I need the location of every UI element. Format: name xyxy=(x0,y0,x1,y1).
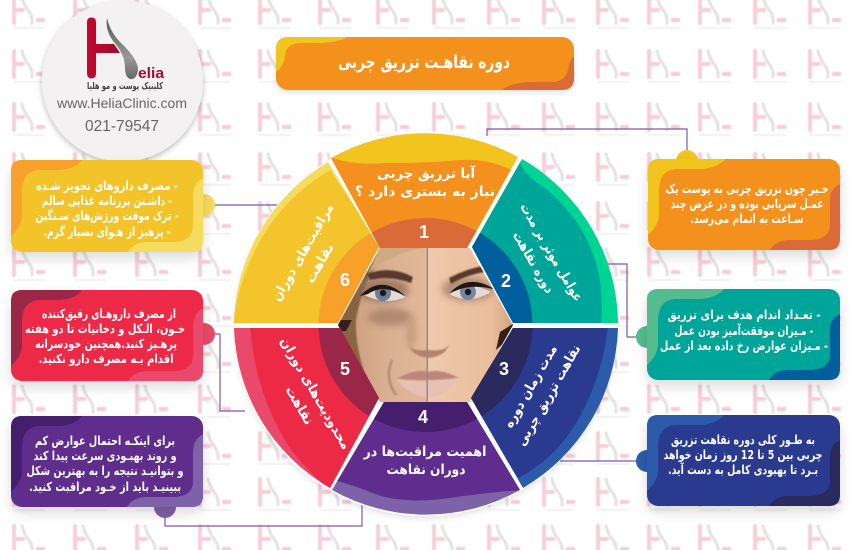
label 2: دوره نقاهت xyxy=(509,229,557,296)
panel: left importance of care: برای اینکـه احتمال عوارض کم xyxy=(35,433,175,448)
panel: right recovery time: چربی بین 5 تا 12 روز زمان خواهد xyxy=(663,447,822,462)
wheel backing xyxy=(234,134,616,516)
number 5: 5 xyxy=(340,359,350,379)
panel: left care tips: - داشـتن بررنامه غذایی سالم xyxy=(42,193,172,208)
wrinkles xyxy=(389,360,396,395)
label 1 xyxy=(355,165,495,200)
segment 6 xyxy=(234,162,379,323)
segment 5 xyxy=(234,328,379,488)
centre divider xyxy=(426,248,428,402)
number 4: 4 xyxy=(418,407,428,427)
phone: 021-79547 xyxy=(85,118,159,135)
connector lines xyxy=(165,129,687,526)
hair xyxy=(338,248,380,373)
lips xyxy=(396,371,459,380)
panel: left importance of care: و بتوانیـد نتیجه را به بهترین شکل xyxy=(26,463,184,478)
eye left xyxy=(360,285,406,301)
panel: right influencing factors xyxy=(636,289,840,380)
panel: left importance of care: ببینیـد باید از خـود مراقبت کنید. xyxy=(29,479,181,494)
panel: left importance of care: و روند بهبـودی سرعت پیدا کند xyxy=(34,448,176,463)
website: www.HeliaClinic.com xyxy=(56,96,187,111)
label 4 xyxy=(363,444,486,478)
eye right xyxy=(449,282,496,300)
panel: right hospitalization answer: سـاعت به اتمام می‌رسد. xyxy=(690,211,804,227)
number 1: 1 xyxy=(419,222,429,242)
face photo xyxy=(338,248,513,402)
label 4: دوران نقاهت xyxy=(386,462,466,478)
label 5: محدودیت‌های دوران xyxy=(276,335,354,452)
label 1: آیا تزریق چربی xyxy=(377,165,475,182)
label 6: مراقبت‌های دوران xyxy=(268,201,337,304)
eye shadows and cheeks xyxy=(368,308,412,326)
segment 2 xyxy=(472,159,618,323)
number 6: 6 xyxy=(340,270,350,290)
panel: left restrictions: اقدام بـه مصرف دارو نکنید. xyxy=(38,351,174,367)
panel: left care tips: - مصرف داروهای تجویز شـده xyxy=(36,178,178,193)
logo wordmark: elia xyxy=(138,65,165,82)
number 3: 3 xyxy=(499,359,509,379)
panel: right recovery time xyxy=(636,415,840,506)
logo subtitle: کلینیک پوست و مو هلیا xyxy=(87,81,163,92)
segment 1 xyxy=(331,133,518,248)
panel: left care tips: - ترک موقت ورزش‌های سـنگین xyxy=(36,208,178,223)
label 5: نقاهت xyxy=(282,383,317,428)
segment 4 xyxy=(332,402,520,515)
label 2 xyxy=(509,200,586,305)
eyebrows xyxy=(367,270,413,283)
panel: left restrictions: از مصرف داروهـای رقیق‌کننده xyxy=(42,306,176,321)
panel: left care tips xyxy=(11,160,215,252)
label 3: مدت زمان دوره xyxy=(501,342,561,431)
label 4: اهمیت مراقبت‌ها در xyxy=(363,444,486,460)
logo badge xyxy=(42,0,203,162)
label 2: عوامل موثر بر مدت xyxy=(516,200,586,305)
panel: left restrictions: خـون، الـکل و دخانیات تا دو هفته xyxy=(25,321,185,336)
panel: right hospitalization answer xyxy=(648,150,840,250)
number 2: 2 xyxy=(501,271,511,291)
label 3: نقاهت تزریق چربی xyxy=(513,342,584,449)
label 1: نیاز به بستری دارد ؟ xyxy=(355,184,495,200)
label 6: نقاهت xyxy=(302,241,338,286)
segment 3 xyxy=(471,328,618,488)
panel: right influencing factors: - تعـداد اندام هدف برای تزریق xyxy=(668,307,820,323)
panel: left restrictions: پرهـیز کنید.همچنین خودسرانه xyxy=(35,336,177,351)
nose xyxy=(408,344,449,358)
panel: left care tips: - پرهیز از هـوای بسیار گرم. xyxy=(44,224,170,240)
title banner: دوره نقاهـت تزریق چربی xyxy=(338,52,510,73)
logo mark xyxy=(87,18,138,79)
title banner xyxy=(276,37,574,90)
panel: left importance of care xyxy=(11,416,203,518)
panel: left restrictions xyxy=(11,290,215,381)
